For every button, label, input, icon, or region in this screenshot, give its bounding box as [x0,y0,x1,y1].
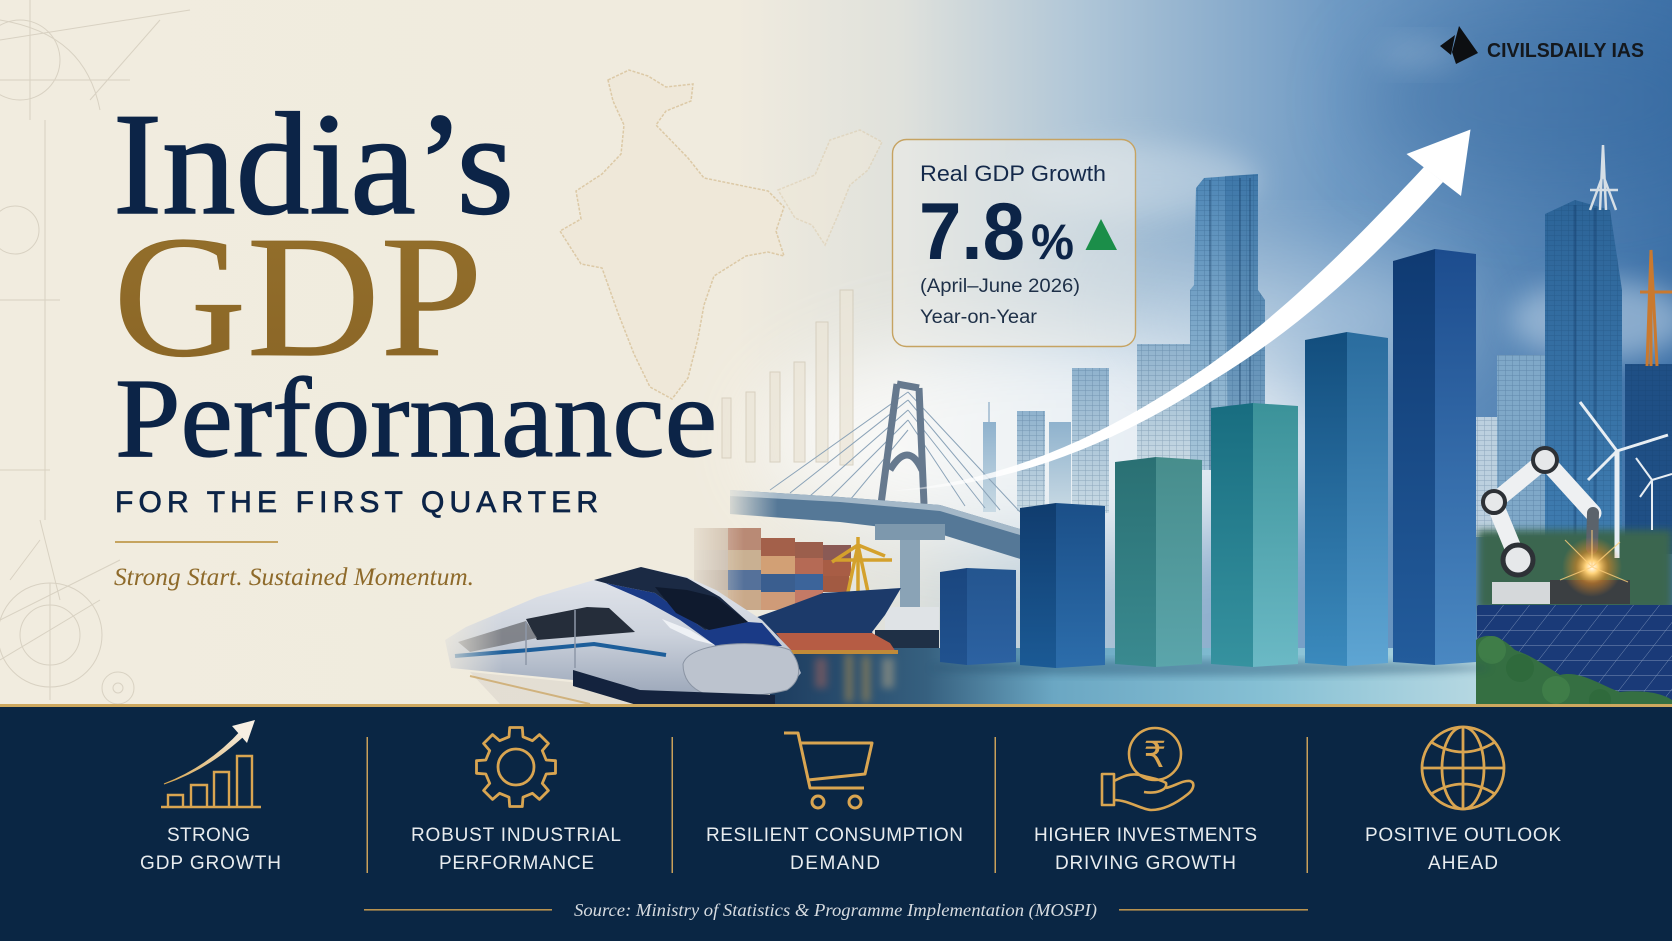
high-speed train [445,567,801,706]
title line: GDP: GDP [113,200,483,393]
welding spark [1560,530,1628,597]
bar 4 [1211,403,1298,667]
logo text: CIVILSDAILY IAS [1487,40,1644,62]
India map watermark [560,70,882,399]
label: POSITIVE OUTLOOK [1365,825,1561,846]
icon: globe [1422,727,1504,809]
callout value: 7.8 [919,187,1025,277]
label: GDP GROWTH [140,853,281,874]
bar chart [930,249,1490,676]
label [1034,825,1257,874]
callout label: Real GDP Growth [920,161,1106,186]
bar 6 [1393,249,1476,665]
label [706,825,963,874]
panel: robust industrial performance [411,728,621,874]
icon: logo mark [1440,26,1478,64]
cargo containers [694,528,851,610]
cable-stayed bridge [730,384,1030,615]
title line: Performance: Performance [115,356,717,481]
bar 1 [940,568,1016,665]
label: RESILIENT CONSUMPTION [706,825,963,846]
panel: strong GDP growth [140,720,281,874]
railway platform [470,672,650,704]
subtitle: FOR THE FIRST QUARTER [115,486,598,519]
callout: real GDP growth [892,140,1136,346]
bar 5 [1305,332,1388,666]
foreground trees [1476,636,1672,711]
label [140,825,281,874]
panel: higher investments driving growth [1034,728,1257,874]
wind turbines [1580,402,1672,558]
panel: resilient consumption demand [706,733,963,874]
water reflections [815,654,894,702]
label [1365,825,1561,874]
cargo ship [735,537,939,654]
hero background [0,0,1672,706]
icon: growth bars and arrow [161,720,261,807]
ghost skyline sketch [722,290,853,465]
icon: rupee coin on hand [1102,728,1193,810]
source: Source: Ministry of Statistics & Programme Implementation (MOSPI) [574,900,1097,921]
background city skyline [983,145,1672,554]
callout period: (April–June 2026) [920,276,1080,297]
growth arrow [889,130,1470,491]
icon: shopping cart [784,733,872,808]
clouds and horizon glow [760,10,1672,550]
label [411,825,621,874]
tagline: Strong Start. Sustained Momentum. [114,564,474,591]
label: AHEAD [1428,853,1498,874]
title line: India's: India’s [113,83,514,245]
title [113,83,717,481]
label: PERFORMANCE [439,853,594,874]
solar panels [1477,605,1672,705]
percent sign: % [1031,214,1074,270]
icon: gear [476,728,556,806]
blueprint sketches on left edge [0,0,190,704]
label: DRIVING GROWTH [1055,853,1236,874]
robotic arm [1483,448,1630,604]
label: DEMAND [790,853,880,874]
bar 3 [1115,457,1202,667]
icon: green up triangle [1086,219,1117,250]
callout basis: Year-on-Year [920,307,1038,328]
label: ROBUST INDUSTRIAL [411,825,621,846]
label: HIGHER INVESTMENTS [1034,825,1257,846]
bar 2 [1020,503,1105,668]
robot, renewables and solar scene [1476,402,1672,711]
label: STRONG [167,825,250,846]
water in harbour [770,648,1480,706]
panel: positive outlook ahead [1365,727,1561,874]
icon: rupee coin on hand: ₹ [1144,735,1166,776]
logo [1440,26,1644,64]
bottom panel [0,707,1672,941]
